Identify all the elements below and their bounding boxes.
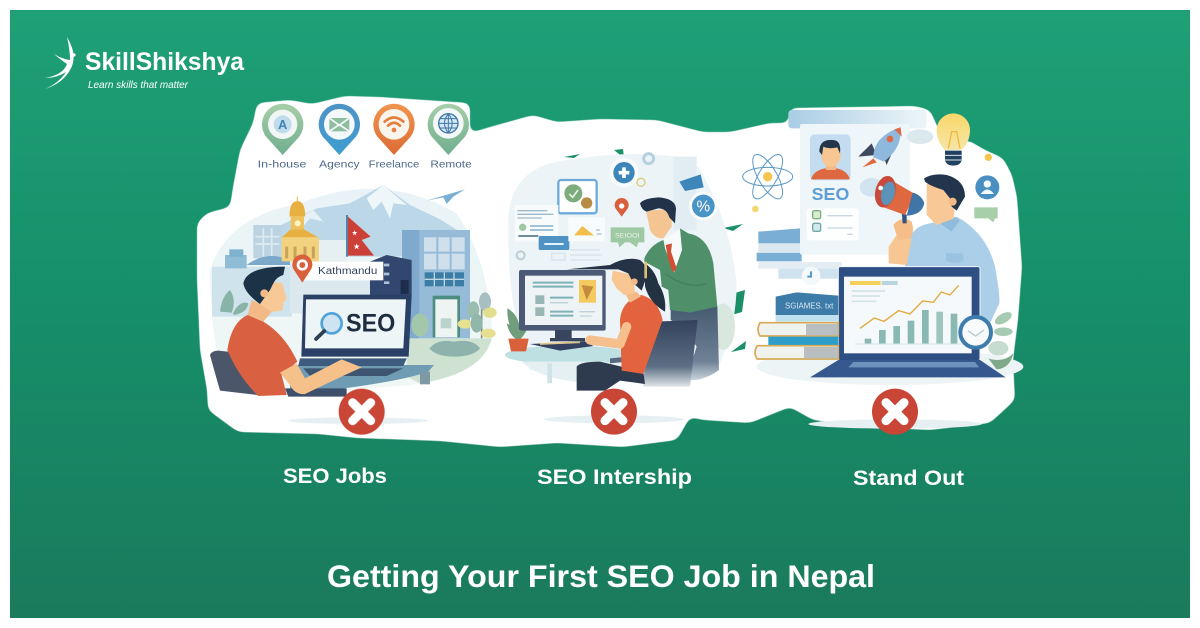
job type pins [258, 104, 472, 170]
icon: tag [679, 174, 704, 191]
office buildings [370, 230, 470, 338]
pin: In-house [258, 104, 307, 170]
Nepal flag [346, 215, 374, 257]
brand logo [45, 37, 245, 91]
pin: Remote: Remote [430, 159, 472, 170]
text lines [552, 250, 602, 260]
tagline: Learn skills that matter [88, 79, 188, 91]
Kathmandu location tag [292, 254, 383, 283]
pin: In-house: A [278, 118, 287, 132]
title: Getting Your First SEO Job in Nepal [327, 558, 875, 594]
icon: percent badge: % [697, 199, 711, 216]
icon: airplane [427, 189, 465, 204]
icon: atom [743, 150, 793, 212]
card: image [568, 217, 605, 241]
speech bubble [611, 227, 644, 247]
bar chart [855, 310, 967, 344]
laptop with growth chart [810, 267, 1006, 377]
plants [988, 310, 1014, 369]
trend line [860, 285, 959, 328]
label: Stand Out: Stand Out [853, 466, 964, 490]
clock tower [282, 197, 319, 261]
icon: location pin [615, 198, 629, 217]
icon: percent badge [689, 192, 718, 220]
desktop monitor [519, 270, 606, 351]
status: cross [288, 389, 428, 435]
profile photo [810, 134, 851, 180]
plant in pot [507, 308, 529, 351]
floating cards and icons [515, 154, 718, 260]
Kathmandu location tag: Kathmandu [318, 266, 377, 277]
status: cross [808, 389, 982, 435]
garden [407, 292, 497, 383]
pin: Agency [319, 104, 361, 170]
card: check chart [558, 180, 597, 213]
SEO heading: SEO [812, 184, 849, 204]
icon: user badge [975, 175, 999, 199]
man with megaphone [889, 174, 999, 323]
icon: clock [960, 317, 991, 348]
scene: SEO internship mentoring [505, 154, 737, 435]
office background [508, 154, 737, 383]
desk [290, 365, 434, 395]
profile card [788, 110, 933, 255]
mentor in green jacket [640, 197, 719, 380]
laptop with SEO search [298, 295, 412, 376]
icon: light bulb [937, 113, 992, 166]
stack of books [755, 292, 838, 359]
card: text lines [515, 205, 558, 242]
soft background [757, 348, 1023, 385]
pin: Freelance: Freelance [369, 159, 420, 170]
speech bubble: SEIOOI [615, 232, 640, 239]
button [539, 236, 569, 250]
stack of books: SGIAMES. txt [785, 300, 834, 310]
pin: Remote [428, 104, 472, 170]
icon: rocket [858, 127, 902, 167]
status: cross [544, 389, 684, 435]
icon: leaping figure [45, 37, 76, 89]
job seeker man [227, 267, 362, 397]
scene: stand out [743, 110, 1023, 435]
icon: megaphone [872, 174, 924, 216]
chair [610, 320, 698, 387]
scene: SEO jobs in Kathmandu [210, 104, 497, 435]
brand name: SkillShikshya [85, 48, 245, 76]
woman at computer [567, 259, 665, 391]
green gaps in backdrop [564, 149, 746, 352]
label: SEO Intership: SEO Intership [537, 465, 692, 489]
white torn-paper backdrop [197, 96, 1022, 447]
city skyline [210, 185, 493, 395]
chair [210, 351, 258, 395]
label: SEO Jobs: SEO Jobs [283, 464, 387, 488]
pin: Agency: Agency [319, 159, 361, 170]
stacked books behind [757, 228, 842, 285]
pin: In-house: In-house [258, 159, 307, 170]
pin: Freelance [369, 104, 420, 170]
checklist [807, 208, 859, 240]
laptop with SEO search: SEO [346, 309, 395, 337]
icon: blue badge [609, 154, 654, 187]
speech bubble [974, 207, 998, 222]
desk [505, 346, 632, 383]
